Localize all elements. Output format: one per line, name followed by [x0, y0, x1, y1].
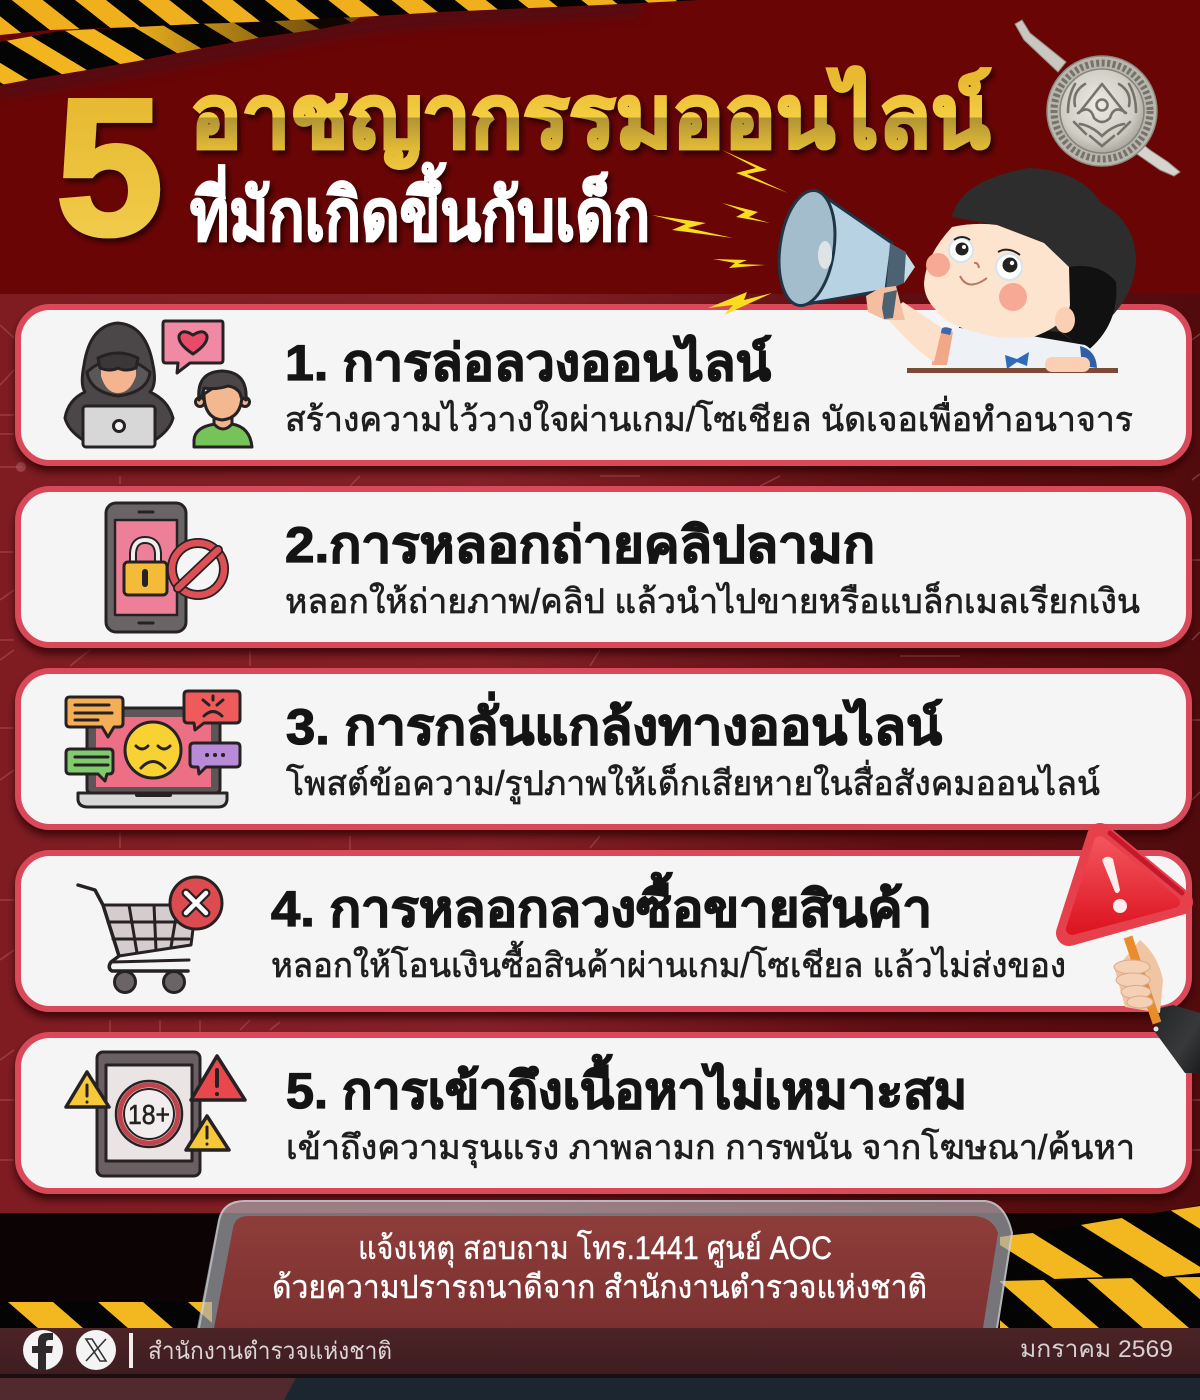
- card 5: [18, 1035, 1189, 1191]
- card 5 description: เข้าถึงความรุนแรง ภาพลามก การพนัน จากโฆษณา/ค้นหา: [286, 1128, 1135, 1168]
- background: lower circuit panel: [0, 294, 1200, 1214]
- title line 1: อาชญากรรมออนไลน์: [190, 67, 990, 170]
- footer date: มกราคม 2569: [1020, 1336, 1173, 1363]
- card 5 heading: 5. การเข้าถึงเนื้อหาไม่เหมาะสม: [286, 1054, 967, 1119]
- face: [924, 224, 1070, 338]
- icon: X: [76, 1330, 116, 1370]
- lightning bolt over card 1: [708, 292, 772, 315]
- icon: hacker and child: [65, 321, 252, 447]
- icon: locked phone: [106, 503, 225, 632]
- icon: sad laptop with chat bubbles: [66, 691, 240, 807]
- card 3: [18, 671, 1189, 827]
- card 3 description: โพสต์ข้อความ/รูปภาพให้เด็กเสียหายในสื่อสังคมออนไลน์: [286, 760, 1100, 804]
- contact panel: [197, 1200, 1013, 1328]
- contact line 1: แจ้งเหตุ สอบถาม โทร.1441 ศูนย์ AOC: [358, 1230, 832, 1268]
- table edge: [907, 368, 1118, 373]
- warning sign held by hand: [1069, 833, 1200, 1073]
- title number 5: 5: [56, 59, 163, 276]
- footer dark band with tapes: [0, 1205, 1200, 1329]
- emblem: police shield and sword: [1015, 20, 1180, 176]
- footer bar: [0, 1328, 1200, 1400]
- icon: tablet with 18+ and warnings: [66, 1052, 245, 1176]
- icon: facebook: [23, 1330, 63, 1370]
- card 1 description: สร้างความไว้วางใจผ่านเกม/โซเชียล นัดเจอเพื่อทำอนาจาร: [285, 396, 1133, 439]
- card 2 description: หลอกให้ถ่ายภาพ/คลิป แล้วนำไปขายหรือแบล็กเมลเรียกเงิน: [285, 581, 1140, 621]
- hazard tape: top left: [0, 0, 700, 85]
- footer agency name: สำนักงานตำรวจแห่งชาติ: [148, 1338, 392, 1365]
- icon: tablet with 18+ and warnings: 18+: [128, 1099, 170, 1130]
- icon: shopping cart with cross: [78, 877, 222, 992]
- lightning bolts: [652, 150, 788, 268]
- card 4 description: หลอกให้โอนเงินซื้อสินค้าผ่านเกม/โซเชียล แล้วไม่ส่งของ: [271, 941, 1066, 985]
- card 2 heading: 2.การหลอกถ่ายคลิปลามก: [285, 517, 875, 573]
- background: dark red header: [0, 0, 1200, 294]
- megaphone: [772, 187, 915, 309]
- card 3 heading: 3. การกลั่นแกล้งทางออนไลน์: [286, 692, 943, 755]
- card 1: [18, 307, 1189, 463]
- card 2: [18, 489, 1189, 645]
- contact line 2: ด้วยความปรารถนาดีจาก สำนักงานตำรวจแห่งชาติ: [272, 1269, 927, 1305]
- card 4 heading: 4. การหลอกลวงซื้อขายสินค้า: [271, 872, 932, 937]
- card 4: [18, 853, 1189, 1009]
- shirt: [945, 328, 1097, 368]
- fingers on table: [1045, 357, 1090, 372]
- character: child with megaphone: [772, 168, 1136, 373]
- card 1 heading: 1. การล่อลวงออนไลน์: [285, 334, 772, 391]
- title line 2: ที่มักเกิดขึ้นกับเด็ก: [190, 162, 650, 256]
- hair back: [952, 168, 1136, 352]
